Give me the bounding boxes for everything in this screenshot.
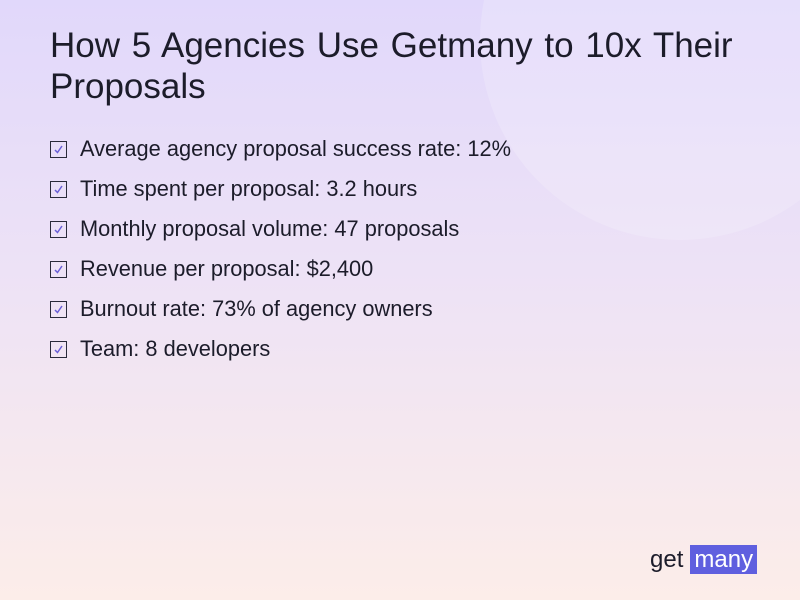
- item 3: Monthly proposal volume: 47 proposals: [80, 216, 459, 241]
- item 6: Team: 8 developers: [80, 336, 270, 361]
- item 1: Average agency proposal success rate: 12%: [80, 136, 511, 161]
- checklist: [50, 136, 511, 361]
- logo: many: [694, 546, 753, 573]
- item 5: Burnout rate: 73% of agency owners: [80, 296, 433, 321]
- logo: [650, 545, 757, 574]
- title: How 5 Agencies Use Getmany to 10x Their Proposals: [50, 26, 733, 106]
- item 2: Time spent per proposal: 3.2 hours: [80, 176, 417, 201]
- item 4: Revenue per proposal: $2,400: [80, 256, 373, 281]
- logo: get: [650, 546, 683, 572]
